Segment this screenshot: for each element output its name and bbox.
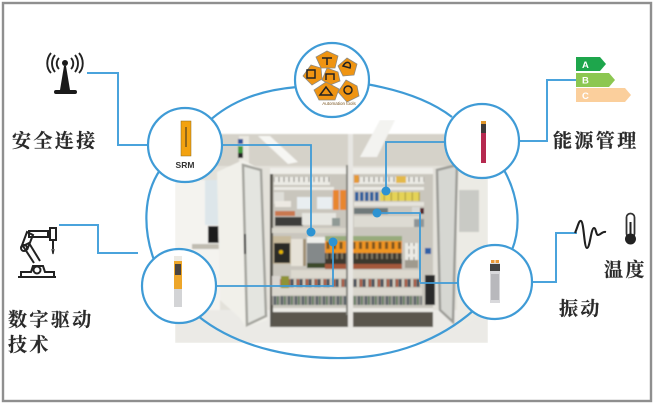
emblem caption: Automation tools: [322, 101, 357, 106]
connector: wireless to SRM: [87, 73, 150, 145]
large ring connecting the circles: [146, 84, 518, 358]
connector: energy labels to energy module: [517, 80, 577, 141]
circle: safety relay SRM: [148, 108, 222, 182]
icon: wireless antenna: [47, 53, 83, 94]
label: SRM: SRM: [176, 160, 194, 170]
icon: energy rating labels: A: [582, 60, 589, 71]
photo: control cabinet: [175, 120, 488, 343]
connector: vibration wave to sensor module: [531, 233, 577, 282]
heading: energy management: 能源管理: [553, 130, 639, 152]
emblem: orange pentagons: [303, 51, 359, 102]
icon: energy rating labels: [576, 57, 631, 102]
icon: thermometer: [625, 214, 636, 244]
heading: digital drive technology: 数字驱动: [8, 309, 94, 331]
icon: energy rating labels: C: [582, 91, 589, 102]
heading: safe connection: 安全连接: [12, 130, 98, 152]
connector: robot to drive module: [59, 225, 138, 253]
circle: digital drive module: [142, 249, 216, 323]
heading: vibration: 振动: [559, 298, 602, 320]
heading: digital drive technology: [8, 309, 94, 356]
heading: digital drive technology: 技术: [8, 334, 51, 356]
icon: robot arm: [18, 228, 56, 277]
circle: automation emblem: [295, 43, 369, 117]
icon: energy rating labels: B: [582, 76, 589, 86]
inner connectors with dots: [214, 142, 460, 286]
circle: vibration and temperature sensor module: [458, 245, 532, 319]
cabinet back plate: [270, 168, 433, 316]
circle: energy module: [445, 104, 519, 178]
icon: vibration wave: [575, 221, 606, 248]
heading: temperature: 温度: [604, 258, 647, 281]
